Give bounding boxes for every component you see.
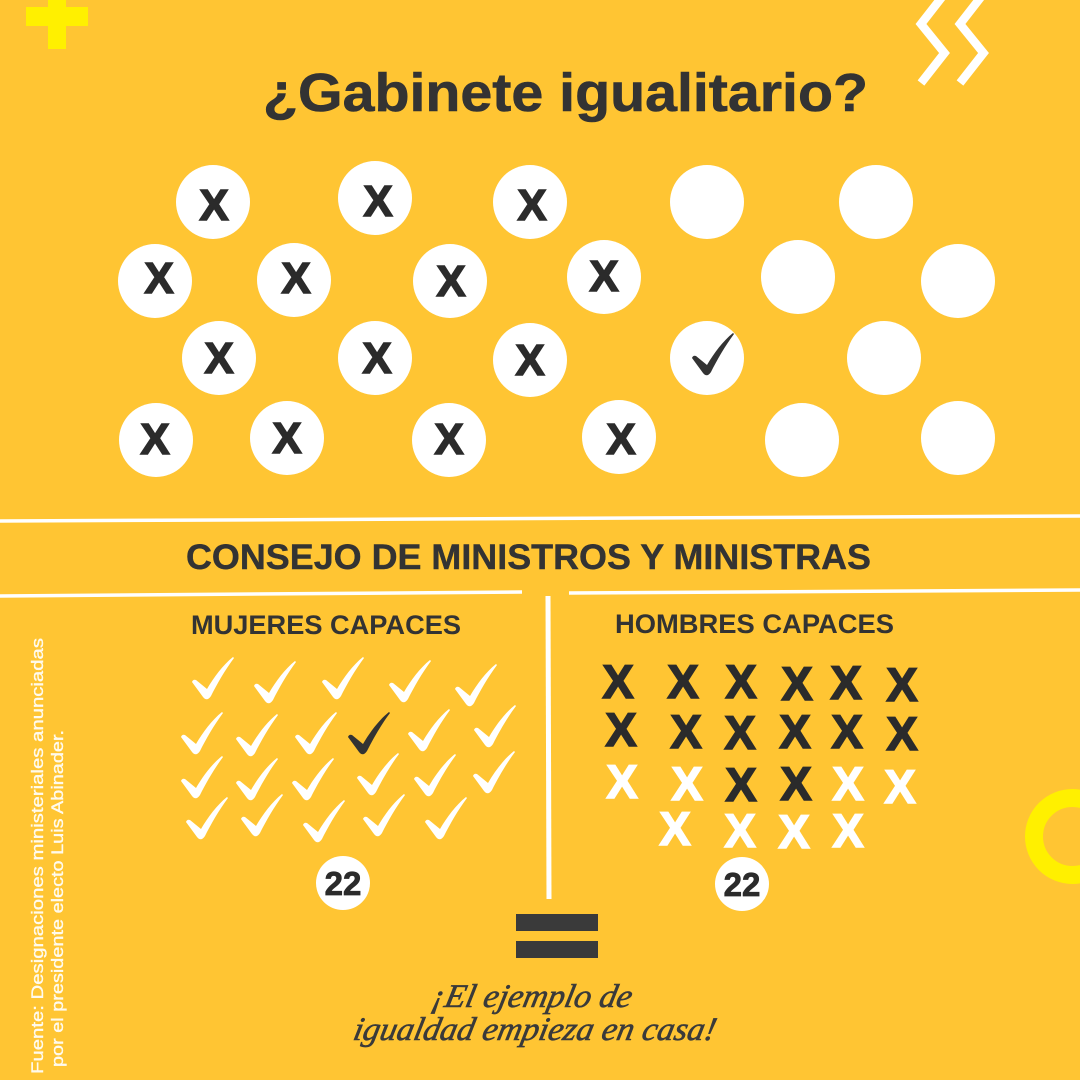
source note [28, 638, 67, 1074]
heading: hombres: HOMBRES CAPACES [615, 609, 894, 639]
seat marks: X: X [204, 334, 234, 383]
badge: 22 mujeres: 22 [325, 865, 361, 902]
icon: equals sign [516, 914, 598, 958]
source note: por el presidente electo Luis Abinader. [48, 730, 67, 1067]
seat marks: X: X [144, 254, 174, 303]
heading: consejo: CONSEJO DE MINISTROS Y MINISTRAS [186, 538, 871, 577]
dividers [0, 516, 1080, 596]
seat marks: X: X [515, 336, 545, 385]
dark x marks: X [605, 703, 637, 756]
closing message: igualdad empieza en casa! [350, 1011, 720, 1048]
seat marks: X: X [517, 181, 547, 230]
dark x marks: X [670, 705, 702, 758]
icon: white zigzag [921, 0, 984, 83]
dark x marks: X [781, 657, 813, 710]
seat marks: X: X [362, 334, 392, 383]
seat mark: check [692, 333, 734, 375]
dark x marks: X [886, 707, 918, 760]
badge: 22 hombres: 22 [724, 866, 760, 903]
seat marks: X: X [436, 257, 466, 306]
icon: yellow ring [1034, 798, 1080, 875]
white x marks: X [724, 804, 756, 857]
dark x marks: X [667, 655, 699, 708]
dark x marks: X [831, 705, 863, 758]
heading: mujeres: MUJERES CAPACES [191, 610, 461, 640]
dark x marks: X [725, 758, 757, 811]
panel: checks mujeres [181, 657, 516, 842]
dark x marks: X [725, 655, 757, 708]
seat marks: X: X [363, 177, 393, 226]
seat marks: X: X [589, 252, 619, 301]
seat marks: X: X [434, 415, 464, 464]
white x marks: X [606, 755, 638, 808]
badge: 22 mujeres [316, 856, 370, 910]
white x marks: X [671, 757, 703, 810]
seat marks: X: X [281, 254, 311, 303]
dark x marks: X [779, 705, 811, 758]
white x marks: X [884, 760, 916, 813]
source note: Fuente: Designaciones ministeriales anunciadas [28, 638, 47, 1074]
white x marks: X [832, 804, 864, 857]
seat marks: X: X [606, 415, 636, 464]
white x marks: X [778, 805, 810, 858]
white x marks: X [659, 802, 691, 855]
seat marks: X: X [140, 415, 170, 464]
white x marks [606, 755, 916, 858]
chart: cabinet seats [118, 161, 995, 477]
white x marks: X [832, 757, 864, 810]
seat marks: X [140, 177, 636, 464]
title: ¿Gabinete igualitario? [263, 63, 868, 123]
seat marks: X: X [272, 414, 302, 463]
dark x marks: X [602, 655, 634, 708]
seats: white circles [118, 161, 995, 477]
badge: 22 hombres [715, 857, 769, 911]
dark x marks: X [886, 658, 918, 711]
dark x marks [602, 655, 918, 811]
dark x marks: X [780, 757, 812, 810]
closing message [350, 978, 720, 1048]
panel: x marks hombres [602, 655, 918, 858]
icon: yellow plus [26, 0, 88, 49]
closing message: ¡El ejemplo de [428, 978, 636, 1015]
seat marks: X: X [199, 181, 229, 230]
dark x marks: X [830, 656, 862, 709]
dark x marks: X [724, 706, 756, 759]
